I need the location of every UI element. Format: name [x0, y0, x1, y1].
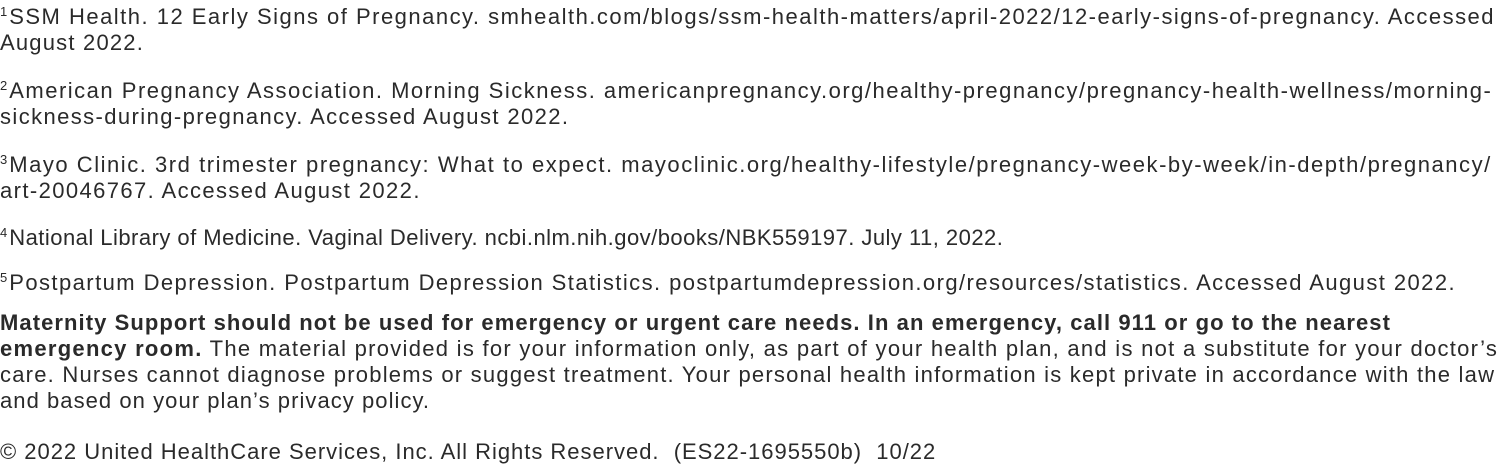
reference 2: 2American Pregnancy Association. Morning Sickness. americanpregnancy.org/healthy-pregnancy/pregnancy-health-wellness/morning-	[0, 78, 1492, 103]
reference 1: August 2022.	[0, 30, 144, 55]
reference 3: art-20046767. Accessed August 2022.	[0, 178, 421, 203]
reference 2	[0, 78, 1492, 129]
reference 3	[0, 152, 1492, 203]
disclaimer: care. Nurses cannot diagnose problems or suggest treatment. Your personal health information is kept private in accordance with the law	[0, 362, 1495, 387]
disclaimer: emergency room. The material provided is for your information only, as part of your health plan, and is not a substitute for your doctor’s	[0, 336, 1498, 361]
reference 1	[0, 4, 1495, 55]
reference 2: sickness-during-pregnancy. Accessed August 2022.	[0, 104, 569, 129]
copyright: © 2022 United HealthCare Services, Inc. All Rights Reserved. (ES22-1695550b) 10/22	[0, 439, 936, 464]
reference 5: 5Postpartum Depression. Postpartum Depression Statistics. postpartumdepression.org/resources/statistics. Accessed August 2022.	[0, 270, 1456, 295]
reference 1: 1SSM Health. 12 Early Signs of Pregnancy. smhealth.com/blogs/ssm-health-matters/april-2022/12-early-signs-of-pregnancy. Accessed	[0, 4, 1495, 29]
reference 3: 3Mayo Clinic. 3rd trimester pregnancy: What to expect. mayoclinic.org/healthy-lifestyle/pregnancy-week-by-week/in-depth/pregnancy/	[0, 152, 1492, 177]
disclaimer: Maternity Support should not be used for emergency or urgent care needs. In an emergency, call 911 or go to the nearest	[0, 310, 1391, 335]
reference 4: 4National Library of Medicine. Vaginal Delivery. ncbi.nlm.nih.gov/books/NBK559197. July 11, 2022.	[0, 225, 1003, 250]
disclaimer: and based on your plan’s privacy policy.	[0, 388, 430, 413]
disclaimer	[0, 310, 1498, 413]
